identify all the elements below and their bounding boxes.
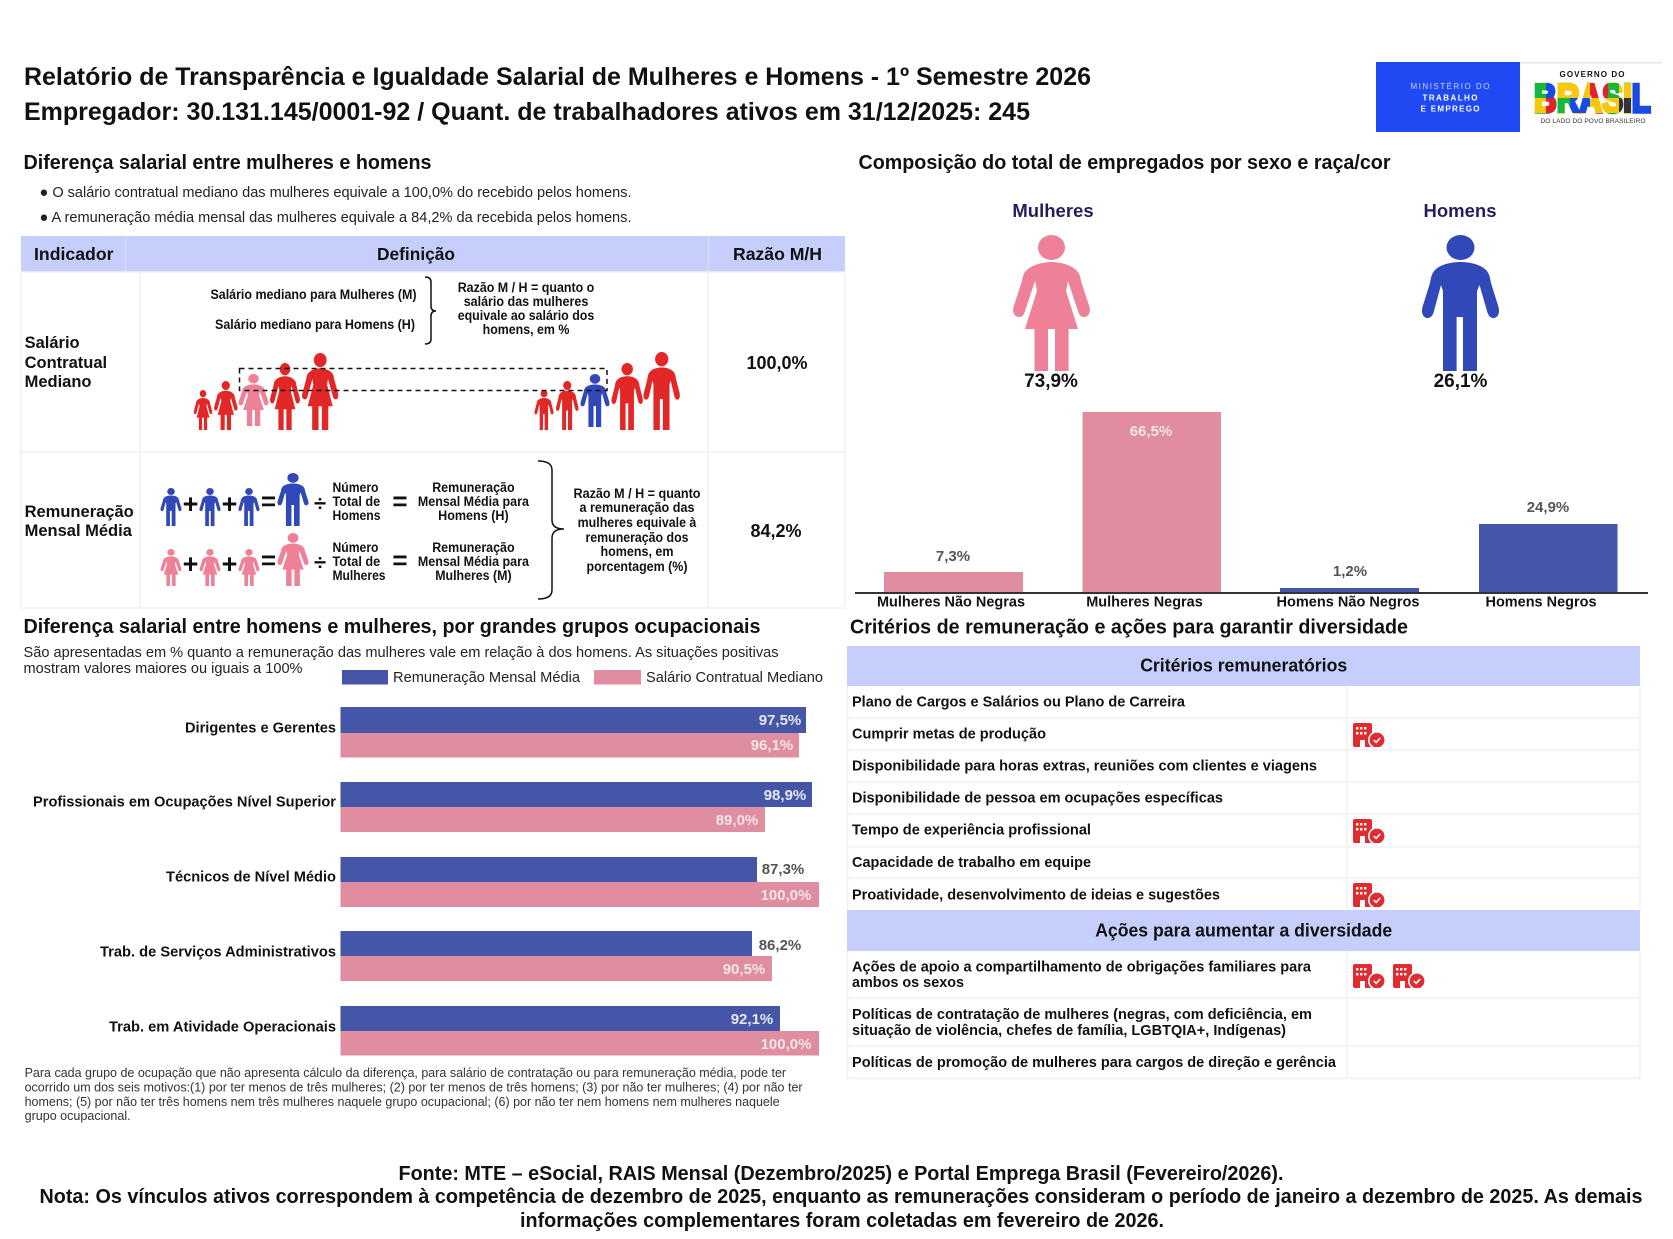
bar chart: sexo e raça/cor: 66,5% [1130, 423, 1172, 440]
group: dirigentes e gerentes: 97,5% [759, 712, 801, 729]
bar chart: sexo e raça/cor: 24,9% [1527, 499, 1569, 516]
brace and ratio definition [538, 461, 700, 599]
equation: mulheres [161, 533, 529, 586]
group: dirigentes e gerentes: 96,1% [751, 737, 793, 754]
action rows: Políticas de promoção de mulheres para cargos de direção e gerência [852, 1055, 1337, 1071]
group: serviços administrativos: Trab. de Serviços Administrativos [100, 944, 336, 960]
panel: mulheres: Mulheres [1012, 200, 1094, 221]
footnote: ocorrido um dos seis motivos:(1) por ter menos de três mulheres; (2) por ter menos de três homens; (3) por não ter mulheres; (4) por não ter [25, 1080, 803, 1094]
group: profissionais nível superior: Profissionais em Ocupações Nível Superior [33, 794, 336, 810]
equation: mulheres: + [183, 549, 198, 579]
row label: remuneração mensal média: Remuneração [25, 503, 134, 521]
group: técnicos de nível médio: 100,0% [761, 887, 811, 904]
title [24, 63, 1091, 126]
bar chart: sexo e raça/cor [855, 412, 1648, 610]
action rows: situação de violência, chefes de família, LGBTQIA+, Indígenas) [852, 1023, 1286, 1039]
definition: salário mediano: salário das mulheres [464, 294, 588, 309]
logo: ministério and governo do Brasil: TRABALHO [1422, 94, 1478, 103]
brace and ratio definition: a remuneração das [580, 500, 694, 515]
legend [342, 669, 823, 686]
equation: mulheres: Número [332, 540, 378, 555]
definition: salário mediano: equivale ao salário dos [458, 308, 594, 323]
footnote: homens; (5) por não ter três homens nem três mulheres naquele grupo ocupacional; (6) por não ter nem homens nem mulheres naquele [25, 1094, 780, 1109]
group: profissionais nível superior: 98,9% [764, 787, 806, 804]
panel: homens [1422, 200, 1499, 392]
equation: homens: ÷ [314, 491, 326, 516]
heading: composição: Composição do total de empregados por sexo e raça/cor [858, 151, 1391, 174]
action rows: Ações de apoio a compartilhamento de obrigações familiares para [852, 960, 1312, 976]
group: atividade operacionais: 92,1% [731, 1011, 773, 1028]
equation: homens [161, 473, 529, 526]
header: critérios remuneratórios: Critérios remuneratórios [1140, 656, 1347, 676]
row label: remuneração mensal média [25, 503, 134, 540]
equation: mulheres: + [222, 549, 237, 579]
equation: homens: Homens [332, 508, 380, 523]
group: atividade operacionais: Trab. em Atividade Operacionais [109, 1020, 336, 1036]
heading: critérios: Critérios de remuneração e ações para garantir diversidade [850, 616, 1408, 638]
footnote: grupo ocupacional. [25, 1108, 131, 1123]
equation: mulheres: Mulheres [332, 568, 386, 583]
equation: homens: = [261, 486, 276, 516]
brace and ratio definition: homens, em [600, 544, 674, 559]
bar chart: sexo e raça/cor: Homens Negros [1486, 594, 1596, 610]
bullet text block: ● O salário contratual mediano das mulheres equivale a 100,0% do recebido pelos homens. [40, 184, 632, 201]
row label: remuneração mensal média: Mensal Média [25, 522, 133, 540]
action rows: Políticas de contratação de mulheres (negras, com deficiência, em [852, 1007, 1312, 1023]
criteria rows: Cumprir metas de produção [852, 726, 1046, 742]
text block: explicação: São apresentadas em % quanto a remuneração das mulheres vale em relação à dos homens. As situações positivas [24, 644, 779, 661]
icons: empresa ações [1353, 964, 1426, 990]
equation: homens: Mensal Média para [418, 494, 529, 509]
group: técnicos de nível médio: Técnicos de Nível Médio [166, 870, 336, 886]
equation: homens: Número [332, 480, 378, 495]
equation: homens: + [222, 489, 237, 519]
title: Relatório de Transparência e Igualdade Salarial de Mulheres e Homens - 1º Semestre 2026 [24, 63, 1091, 91]
action rows: ambos os sexos [852, 975, 964, 991]
definition: salário mediano: Razão M / H = quanto o [458, 280, 594, 295]
row label: salário contratual mediano: Salário [25, 334, 80, 352]
footer: fonte e nota: informações complementares foram coletadas em fevereiro de 2026. [520, 1210, 1164, 1232]
group: técnicos de nível médio: 87,3% [762, 861, 804, 878]
bar chart: grupos ocupacionais [33, 707, 819, 1056]
equation: homens: Homens (H) [438, 508, 509, 523]
footnote [25, 1065, 803, 1123]
group: dirigentes e gerentes [185, 707, 806, 758]
panel: homens: 26,1% [1434, 371, 1488, 392]
group: profissionais nível superior: 89,0% [716, 812, 758, 829]
header: ações: Ações para aumentar a diversidade [1095, 921, 1392, 941]
logo: ministério and governo do Brasil: DO LADO DO POVO BRASILEIRO [1540, 118, 1646, 125]
equation: mulheres: Mulheres (M) [435, 568, 512, 583]
group: profissionais nível superior [33, 782, 812, 832]
row label: salário contratual mediano [25, 334, 107, 391]
table header: Definição [377, 244, 455, 264]
legend: Remuneração Mensal Média [393, 669, 581, 686]
icon: família de homens [535, 352, 680, 430]
criteria rows: Proatividade, desenvolvimento de ideias e sugestões [852, 888, 1220, 904]
heading: diferença salarial: Diferença salarial entre mulheres e homens [24, 151, 432, 174]
brace and ratio definition: mulheres equivale à [578, 515, 697, 530]
criteria rows: Tempo de experiência profissional [852, 822, 1091, 838]
bar chart: sexo e raça/cor: Mulheres Negras [1086, 594, 1203, 610]
value: 100,0%: 100,0% [746, 353, 808, 373]
criteria rows: Plano de Cargos e Salários ou Plano de Carreira [852, 694, 1186, 710]
bar chart: sexo e raça/cor: 7,3% [936, 548, 970, 565]
footer: fonte e nota: Nota: Os vínculos ativos correspondem à competência de dezembro de 2025, enquanto as remunerações consideram o período de janeiro a dezembro de 2025. As demais [40, 1186, 1642, 1208]
footnote: Para cada grupo de ocupação que não apresenta cálculo da diferença, para salário de contratação ou para remuneração média, pode ter [25, 1065, 787, 1080]
definition: salário mediano: Salário mediano para Mulheres (M) [210, 287, 416, 302]
definition: salário mediano: Salário mediano para Homens (H) [215, 317, 415, 332]
panel: tabela de indicadores [20, 236, 845, 608]
dashed median box [240, 368, 607, 390]
row label: salário contratual mediano: Contratual [25, 354, 107, 372]
table header: Razão M/H [733, 244, 822, 264]
group: serviços administrativos [100, 931, 801, 981]
bar chart: sexo e raça/cor: Homens Não Negros [1276, 594, 1420, 610]
bar chart: sexo e raça/cor: 1,2% [1333, 563, 1367, 580]
panel: homens: Homens [1424, 200, 1496, 221]
criteria rows: Capacidade de trabalho em equipe [852, 855, 1091, 871]
criteria rows [852, 694, 1317, 904]
text block: explicação: mostram valores maiores ou iguais a 100% [24, 660, 302, 677]
brace and ratio definition: porcentagem (%) [586, 559, 688, 574]
row label: salário contratual mediano: Mediano [25, 373, 92, 391]
panel: mulheres: 73,9% [1024, 371, 1078, 392]
brace and ratio definition: remuneração dos [586, 530, 688, 545]
icon: família de mulheres [194, 353, 338, 430]
logo: ministério and governo do Brasil: MINISTÉRIO DO [1410, 82, 1490, 91]
criteria rows: Disponibilidade para horas extras, reuniões com clientes e viagens [852, 758, 1317, 774]
legend: Salário Contratual Mediano [646, 669, 823, 686]
equation: mulheres: Total de [332, 554, 380, 569]
equation: homens: Total de [332, 494, 380, 509]
group: atividade operacionais: 100,0% [761, 1036, 811, 1053]
icon: empresa experiência [1353, 819, 1386, 845]
footer: fonte e nota: Fonte: MTE – eSocial, RAIS Mensal (Dezembro/2025) e Portal Emprega Brasil (Fevereiro/2026). [398, 1163, 1284, 1185]
definition: salário mediano [210, 277, 594, 344]
title: Empregador: 30.131.145/0001-92 / Quant. de trabalhadores ativos em 31/12/2025: 245 [24, 98, 1030, 126]
definition: salário mediano: homens, em % [483, 322, 569, 337]
icon: empresa metas [1353, 723, 1386, 749]
panel: tabela de critérios [847, 646, 1640, 1078]
bullet text block: ● A remuneração média mensal das mulheres equivale a 84,2% da recebida pelos homens. [40, 209, 632, 226]
equation: homens: + [183, 489, 198, 519]
logo: ministério and governo do Brasil: E EMPREGO [1420, 105, 1480, 114]
logo: ministério and governo do Brasil: GOVERNO DO [1560, 70, 1624, 79]
table header: Indicador [34, 244, 114, 264]
equation: mulheres: Mensal Média para [418, 554, 529, 569]
equation: mulheres: Remuneração [432, 540, 515, 555]
logo: ministério and governo do Brasil [1376, 62, 1662, 132]
group: atividade operacionais [109, 1006, 819, 1056]
group: dirigentes e gerentes: Dirigentes e Gerentes [185, 720, 336, 736]
group: serviços administrativos: 90,5% [723, 961, 765, 978]
bar chart: sexo e raça/cor: Mulheres Não Negras [877, 594, 1025, 610]
equation: mulheres: = [261, 545, 276, 575]
footer: fonte e nota [40, 1163, 1642, 1232]
icon: empresa proatividade [1353, 883, 1386, 909]
bullet text block [40, 184, 632, 226]
brace and ratio definition: Razão M / H = quanto [574, 486, 700, 501]
text block: explicação [24, 644, 779, 677]
equation: mulheres: = [392, 545, 408, 575]
equation: mulheres: ÷ [314, 550, 326, 575]
equation: homens: = [392, 486, 408, 516]
equation: homens: Remuneração [432, 480, 515, 495]
table header [34, 244, 822, 264]
group: serviços administrativos: 86,2% [759, 937, 801, 954]
heading: grupos ocupacionais: Diferença salarial entre homens e mulheres, por grandes grupos ocupacionais [24, 615, 760, 638]
value: 84,2%: 84,2% [750, 521, 802, 541]
action rows [852, 960, 1337, 1071]
panel: mulheres [1012, 200, 1094, 392]
criteria rows: Disponibilidade de pessoa em ocupações específicas [852, 790, 1223, 806]
group: técnicos de nível médio [166, 857, 819, 907]
